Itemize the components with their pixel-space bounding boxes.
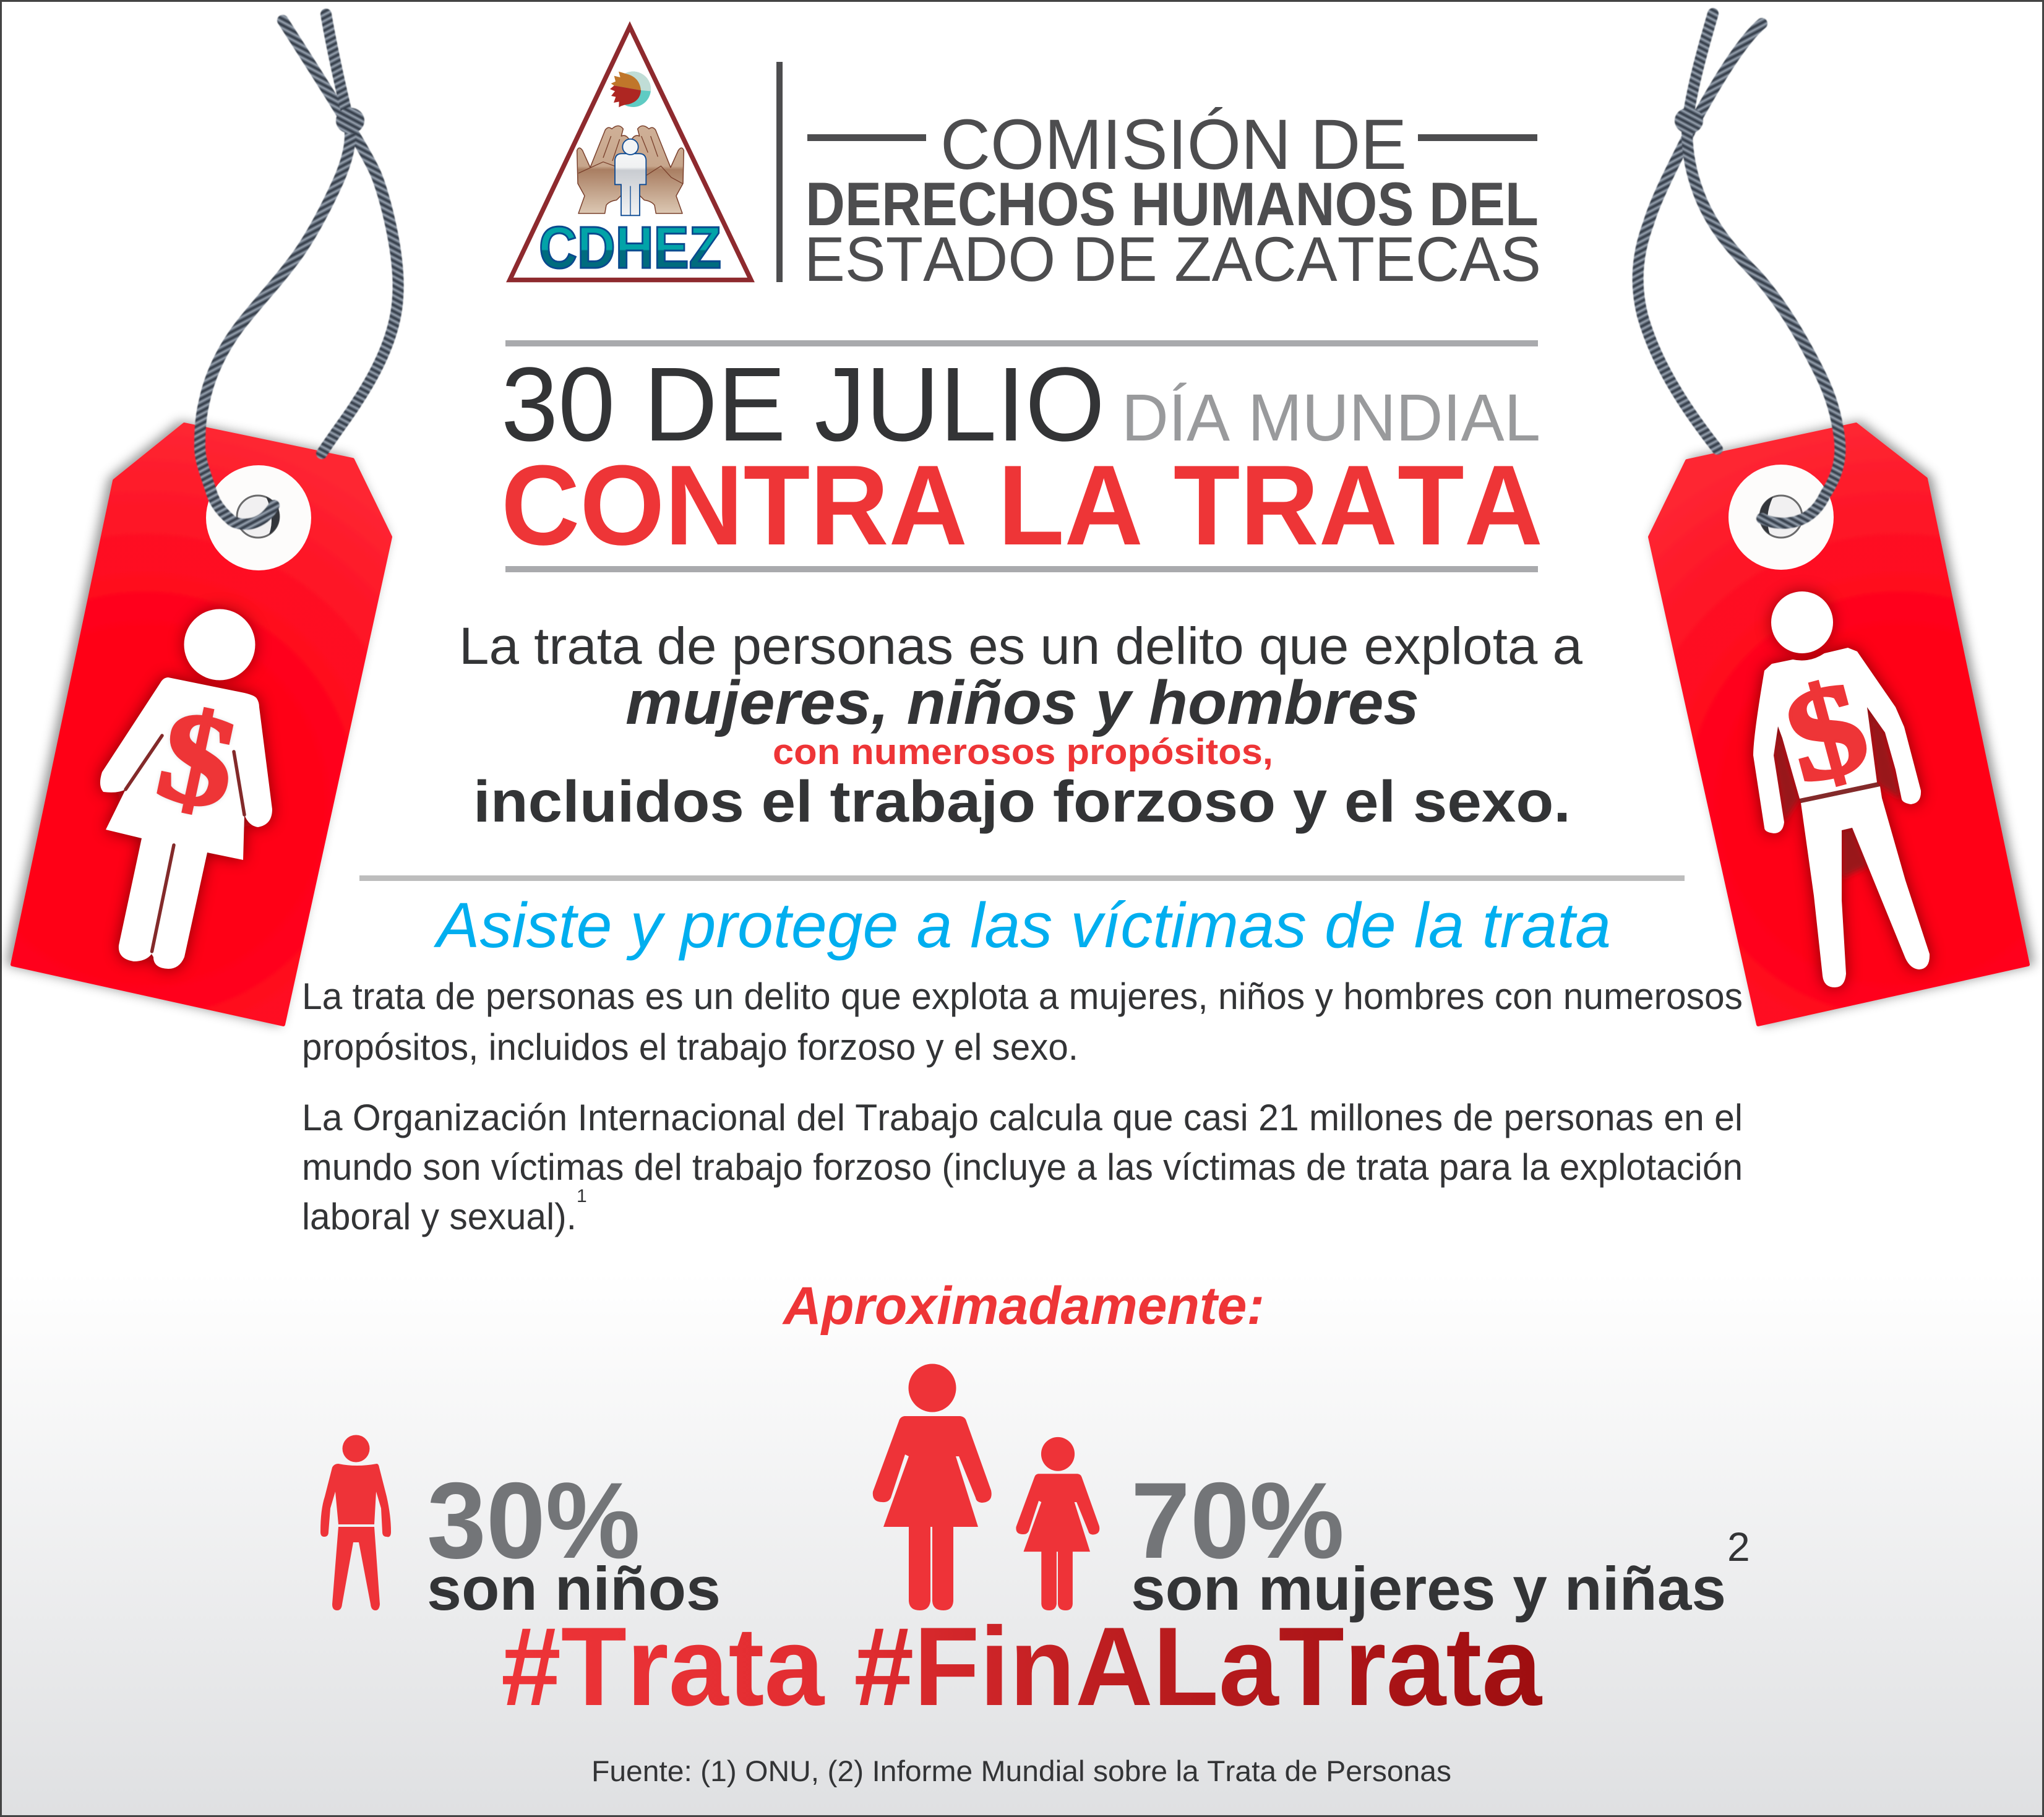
intro statement: incluidos el trabajo forzoso y el sexo.: [473, 769, 1571, 835]
rule above title: [505, 340, 1538, 346]
icon: woman with dollar sign: $: [147, 680, 249, 838]
value 70%: 70%: [1131, 1461, 1344, 1581]
logo: CDHEZ triangle: [510, 27, 751, 281]
icon: girl: [1016, 1437, 1099, 1610]
stat: 70 percent women and girls: [873, 1364, 1750, 1623]
label: son niños: son niños: [427, 1554, 721, 1623]
header: commission name: [804, 105, 1541, 294]
body paragraphs: La trata de personas es un delito que explota a mujeres, niños y hombres con numerosos: [302, 976, 1743, 1017]
tag hole right: [1728, 465, 1834, 570]
title block: CONTRA LA TRATA: [501, 441, 1543, 569]
body paragraphs: mundo son víctimas del trabajo forzoso (incluye a las víctimas de trata para la explotación: [302, 1146, 1743, 1188]
tag shape right: [1650, 424, 2028, 1024]
header: commission name: DERECHOS HUMANOS DEL: [805, 170, 1539, 238]
icon: boy: [320, 1435, 391, 1610]
footnote mark 2: 2: [1727, 1524, 1750, 1570]
intro statement: [459, 617, 1582, 835]
intro statement: mujeres, niños y hombres: [625, 668, 1419, 737]
title block: 30 DE JULIO: [501, 346, 1105, 463]
body paragraphs: propósitos, incluidos el trabajo forzoso y el sexo.: [302, 1026, 1078, 1068]
intro statement: con numerosos propósitos,: [773, 732, 1273, 772]
stat: 30 percent boys: [320, 1435, 721, 1623]
tag shape left: [12, 424, 390, 1024]
panel: right price tag: [1638, 14, 2028, 1024]
icon: hands and person: [577, 126, 684, 215]
icon: woman with dollar sign: [100, 609, 272, 969]
body paragraphs: La Organización Internacional del Trabajo calcula que casi 21 millones de personas en el: [302, 1097, 1743, 1138]
value 30%: 30%: [427, 1461, 640, 1581]
header: commission name: ESTADO DE ZACATECAS: [804, 224, 1541, 294]
panel: left price tag: [12, 14, 398, 1024]
body paragraphs: laboral y sexual).: [302, 1196, 577, 1237]
heading: approximately: Aproximadamente:: [782, 1276, 1265, 1336]
icon: man with dollar sign: $: [1771, 652, 1882, 812]
source note: Fuente: (1) ONU, (2) Informe Mundial sobre la Trata de Personas: [591, 1755, 1451, 1787]
string right: [1638, 14, 1840, 523]
tag hole left: [206, 465, 311, 570]
subheading: Asiste y protege a las víctimas de la trata: [433, 890, 1611, 961]
hashtags: #Trata #FinALaTrata: [501, 1604, 1542, 1729]
icon: woman: [873, 1364, 992, 1610]
body paragraphs: [302, 976, 1743, 1237]
section divider: [359, 875, 1685, 881]
icon: man with dollar sign: [1753, 591, 1930, 987]
intro statement: La trata de personas es un delito que explota a: [459, 617, 1582, 675]
rule below title: [505, 566, 1538, 572]
body paragraphs: 1: [577, 1186, 587, 1206]
icon: woman with dollar sign: $: [147, 680, 249, 838]
title block: DÍA MUNDIAL: [1122, 380, 1540, 455]
icon: sun: [610, 72, 651, 107]
logo divider bar: [776, 62, 783, 282]
header: commission name: COMISIÓN DE: [940, 105, 1407, 184]
string left: [200, 14, 398, 524]
logo wordmark: CDHEZ: [539, 215, 721, 281]
label: son mujeres y niñas: son mujeres y niñas: [1131, 1554, 1726, 1623]
title block: [501, 346, 1543, 569]
